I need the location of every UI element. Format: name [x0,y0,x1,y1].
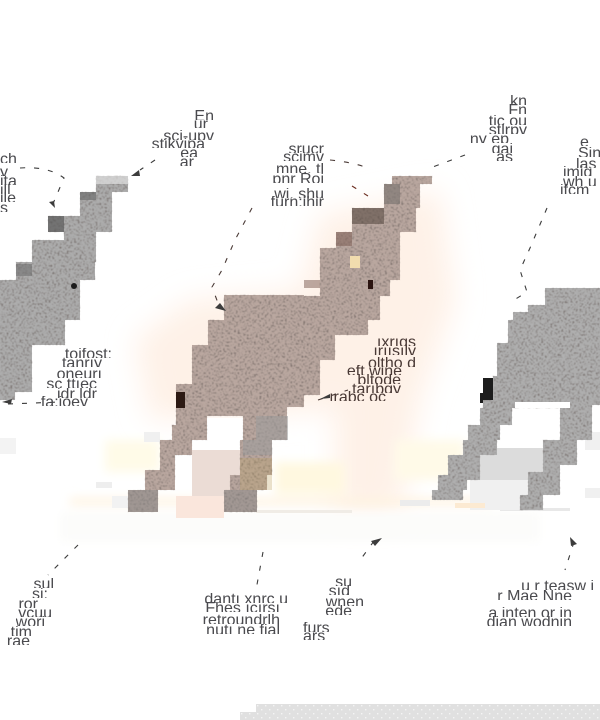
label: bottom centre right [325,576,364,615]
rocker base [0,408,600,542]
label: left middle [41,348,112,406]
eye [71,283,77,289]
label: top centre left [152,110,214,166]
donkey middle: brown [128,176,432,512]
label: bottom left [7,578,54,645]
label: bottom centre [203,593,288,634]
label: far right [560,136,600,194]
dotted footer strip [240,704,600,720]
label: bottom right [487,580,594,626]
dashed leader arrows [8,155,574,590]
donkey left: grey [0,176,128,400]
arrowheads [2,170,577,546]
label: centre top [271,143,324,206]
peach glow behind middle donkey [135,190,455,515]
label: body centre [329,336,416,401]
eye patch and eye [350,256,360,268]
label: furs fragment [303,622,330,640]
donkey right: grey [432,288,600,510]
label: top left [0,153,17,212]
label: top right inner [470,95,527,161]
